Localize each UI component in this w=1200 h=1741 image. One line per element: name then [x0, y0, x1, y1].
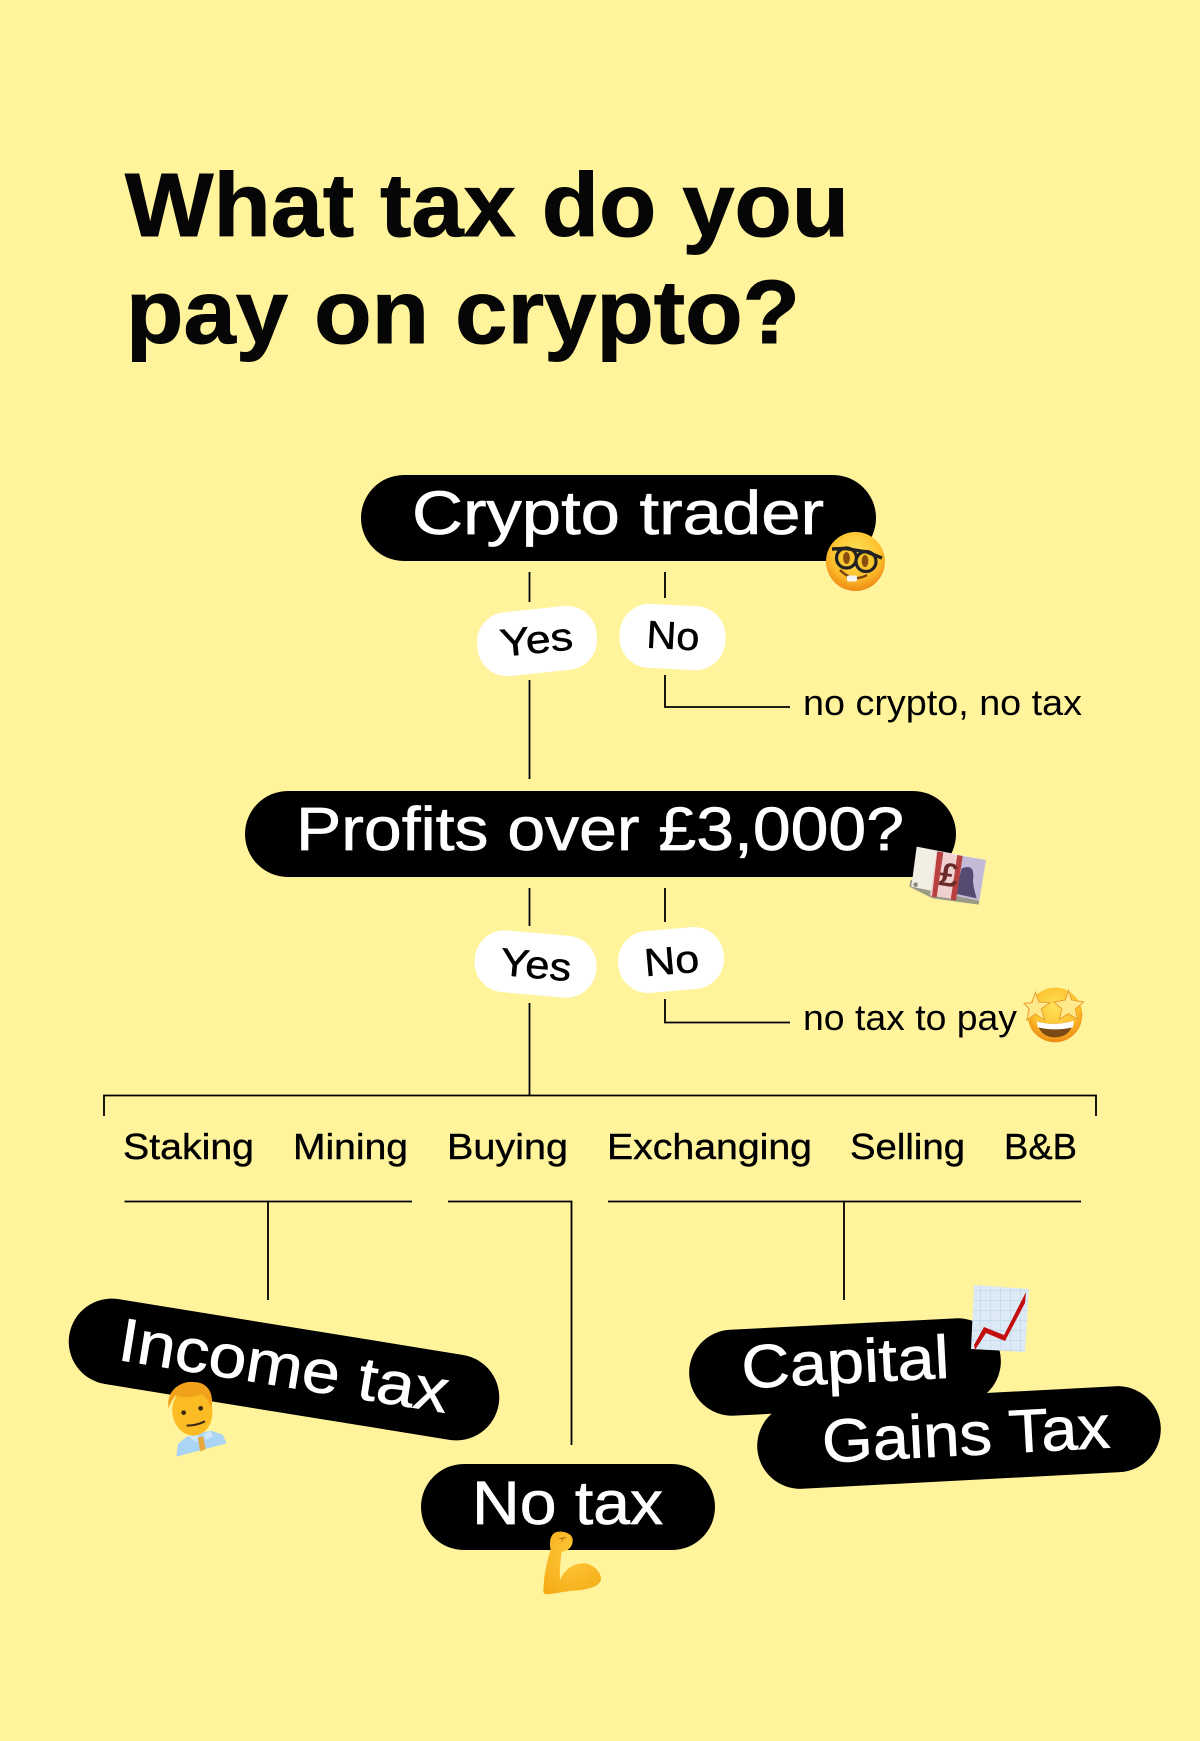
categories row: B&B — [1004, 1126, 1077, 1167]
categories row — [123, 1126, 1077, 1167]
badge: yes: Yes — [499, 941, 573, 990]
title: What tax do you — [125, 156, 849, 256]
categories row: Exchanging — [607, 1126, 812, 1167]
icon: pound banknotes: £ — [937, 856, 961, 896]
pill: income tax — [62, 1292, 506, 1447]
connector: income tax — [124, 1202, 412, 1300]
connector: trader yes — [528, 572, 530, 779]
badge: no: No — [645, 614, 701, 659]
pill: no tax: No tax — [472, 1469, 663, 1537]
icon: star-struck face — [1024, 988, 1084, 1042]
categories row: Selling — [850, 1126, 965, 1167]
icon: man office worker — [168, 1382, 227, 1457]
note: no crypto no tax: no crypto, no tax — [803, 682, 1082, 723]
pill: capital gains tax — [687, 1316, 1163, 1491]
categories row: Mining — [293, 1126, 408, 1167]
category bracket — [104, 1096, 1096, 1116]
badge: no: No — [642, 938, 701, 985]
note: no tax to pay: no tax to pay — [803, 997, 1017, 1038]
categories row: Staking — [123, 1126, 254, 1167]
pill: profits over 3000: Profits over £3,000? — [296, 795, 904, 863]
icon: nerd face — [826, 532, 885, 591]
badge: no — [615, 924, 727, 996]
pill: income tax: Income tax — [114, 1305, 454, 1426]
icon: pound banknotes — [909, 847, 986, 905]
title: pay on crypto? — [126, 263, 800, 363]
badge: yes — [474, 603, 600, 679]
badge: yes — [472, 928, 599, 1000]
connector: trader no — [665, 572, 790, 707]
pill: no tax — [421, 1464, 715, 1550]
badge: no — [618, 602, 727, 672]
icon: flexed biceps — [543, 1532, 601, 1594]
title — [125, 156, 849, 363]
connector: profits yes — [528, 888, 530, 1095]
pill: capital gains tax: Capital — [740, 1323, 951, 1401]
categories row: Buying — [447, 1126, 568, 1167]
pill: crypto trader: Crypto trader — [412, 479, 824, 547]
icon: rising chart — [971, 1285, 1029, 1352]
pill: capital gains tax: Gains Tax — [820, 1393, 1111, 1476]
pill: profits over 3000 — [245, 791, 956, 877]
connector: no tax — [448, 1202, 572, 1445]
badge: yes: Yes — [498, 615, 575, 666]
connector: capital gains tax — [608, 1202, 1081, 1300]
pill: crypto trader — [361, 475, 876, 561]
connector: profits no — [665, 888, 790, 1022]
